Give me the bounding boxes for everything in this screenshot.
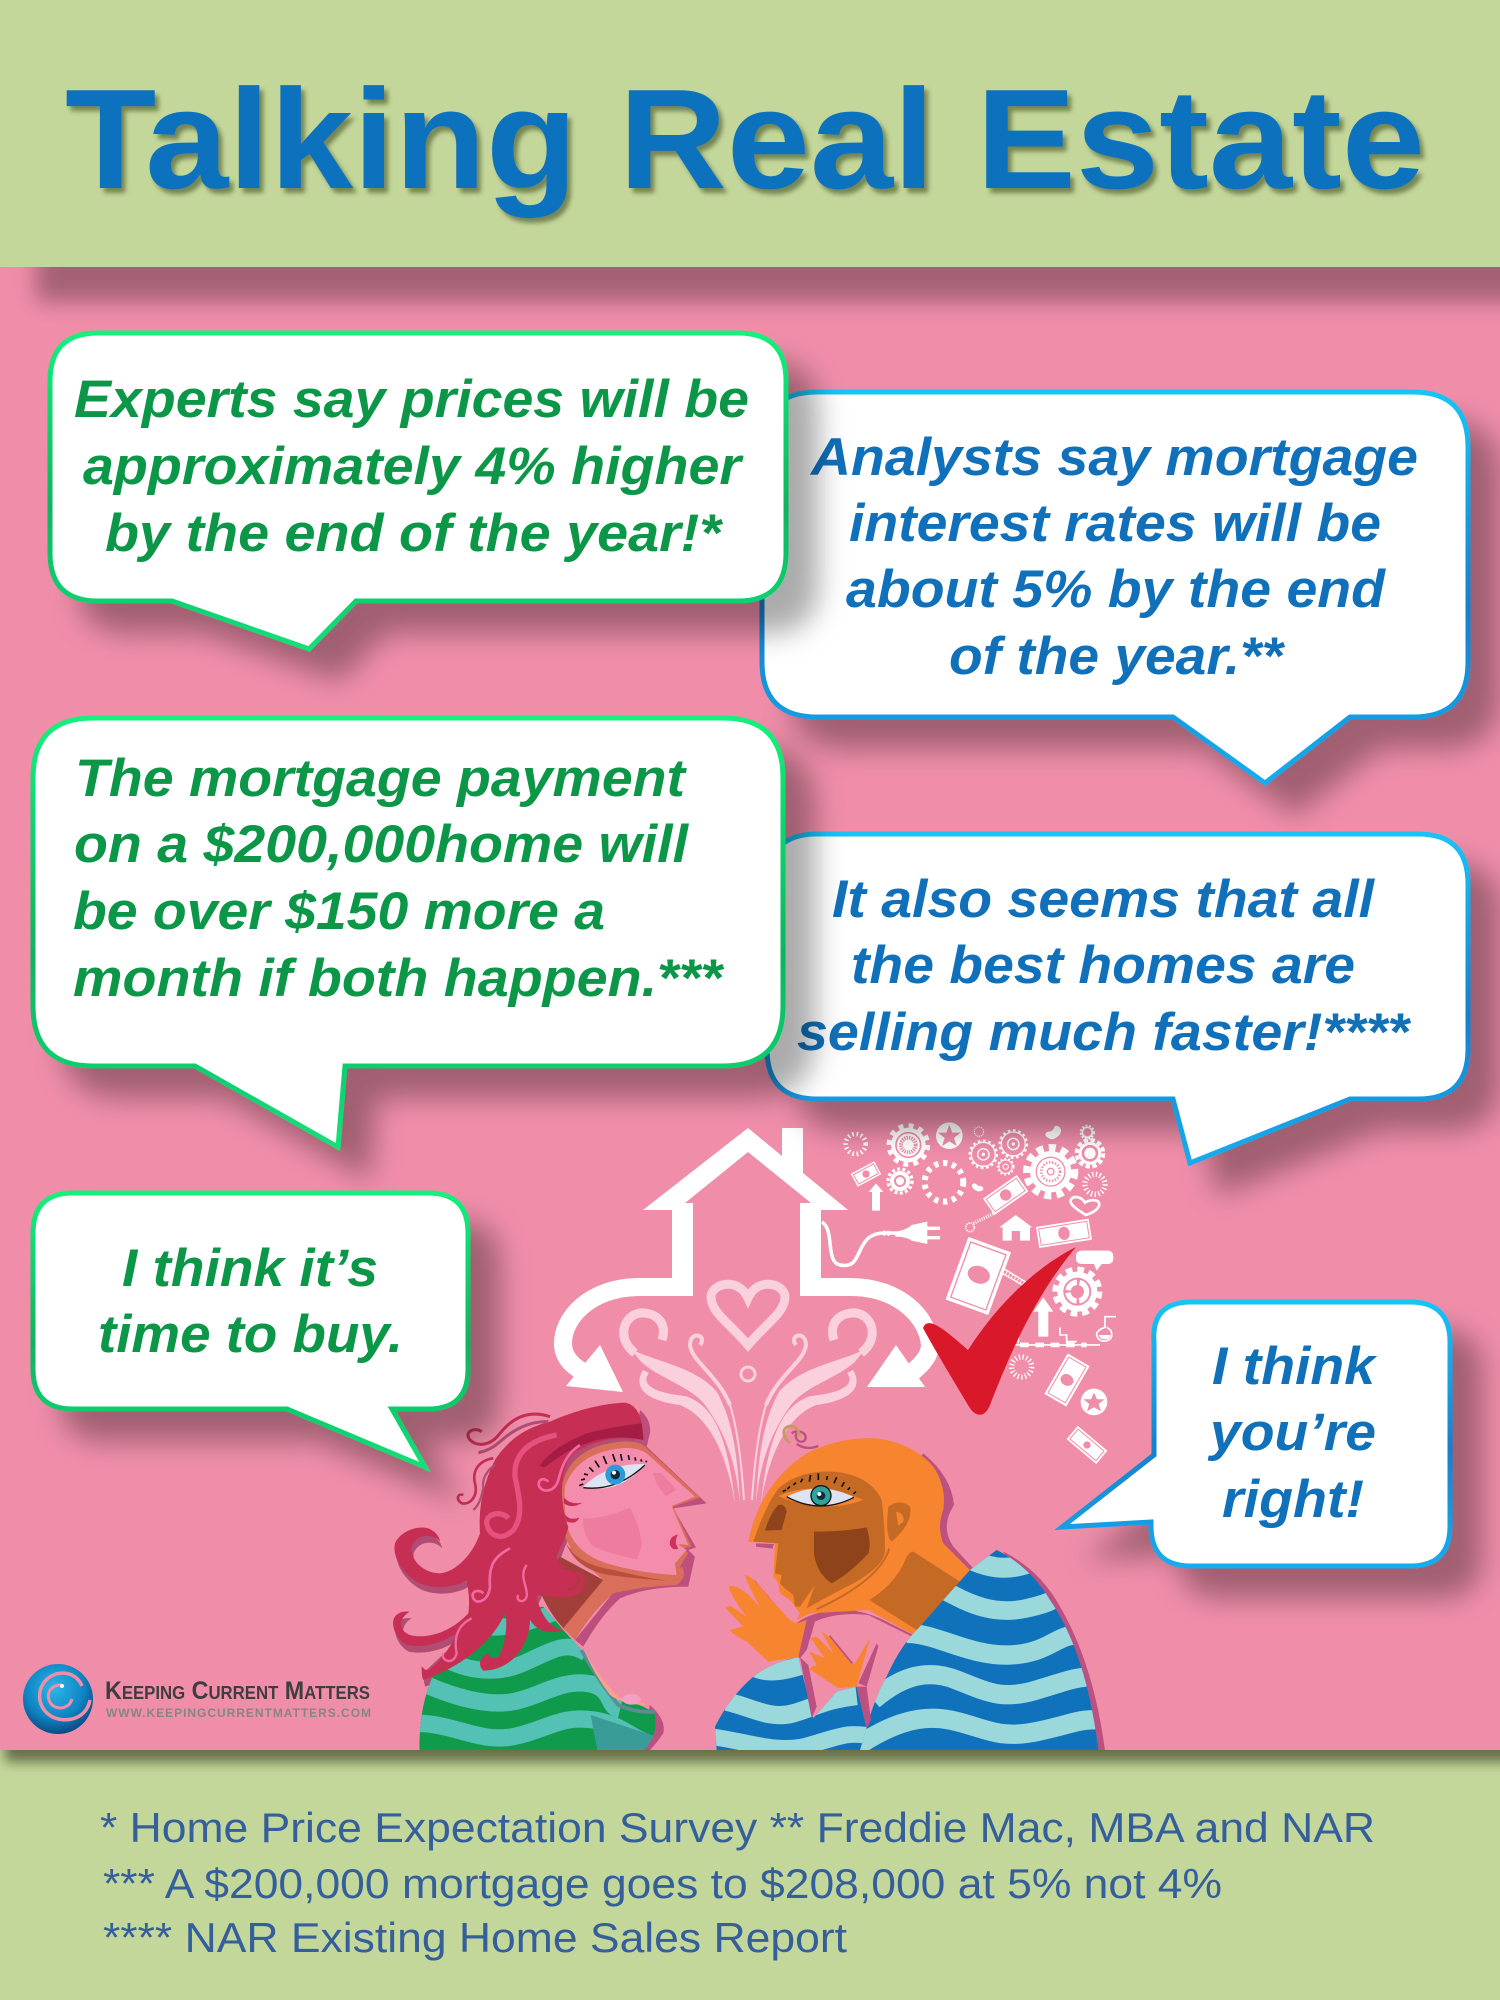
bubble: you're right: I think	[1212, 1337, 1378, 1396]
logo wordmark: Keeping Current Matters	[105, 1677, 370, 1705]
bubble: mortgage rates: of the year.**	[949, 627, 1285, 686]
footer band	[0, 1750, 1500, 2000]
bubble: mortgage payment: month if both happen.***	[73, 949, 724, 1008]
bubble: mortgage payment: on a $200,000home will	[74, 815, 689, 874]
man curl	[784, 1426, 818, 1448]
bubble: prices higher: by the end of the year!*	[105, 504, 723, 563]
woman eye	[579, 1454, 647, 1489]
woman hair shadow	[395, 1409, 645, 1687]
bubble: mortgage rates: interest rates will be	[849, 494, 1381, 553]
title: Talking Real Estate	[65, 60, 1425, 219]
bubble: best homes selling faster: It also seems that all	[832, 870, 1375, 929]
pink background panel	[0, 267, 1500, 1750]
footer band shadow	[0, 1750, 1500, 1771]
man sweater	[857, 1547, 1107, 1750]
footnotes	[100, 1804, 1375, 1961]
bubble: time to buy: I think it’s	[122, 1239, 378, 1298]
illustration: woman	[393, 1403, 707, 1750]
icon: plug cable	[822, 1222, 900, 1265]
bubble: prices higher: approximately 4% higher	[83, 437, 745, 496]
illustration: house with arrows	[563, 1128, 930, 1392]
illustration: man	[710, 1426, 1107, 1750]
illustration: gears, money and icons	[846, 1122, 1116, 1464]
bubble: time to buy	[33, 1193, 468, 1467]
header band	[0, 0, 1500, 267]
woman neck and face	[538, 1410, 707, 1647]
man head	[748, 1438, 973, 1658]
bubble: you're right	[1062, 1302, 1450, 1566]
icon: red check mark	[923, 1247, 1076, 1415]
bubble: prices higher: Experts say prices will be	[74, 370, 749, 429]
logo url: WWW.KEEPINGCURRENTMATTERS.COM	[106, 1706, 371, 1720]
bubble: mortgage rates	[762, 392, 1468, 783]
bubble: mortgage payment: be over $150 more a	[73, 882, 605, 941]
bubble: you're right: right!	[1222, 1470, 1364, 1529]
bubble: prices higher	[50, 333, 786, 649]
man sleeve	[710, 1643, 878, 1750]
logo: Keeping Current Matters	[23, 1664, 371, 1734]
bubble: mortgage rates: about 5% by the end	[846, 560, 1387, 619]
header band shadow	[36, 200, 1500, 302]
footnotes: * Home Price Expectation Survey ** Freddie Mac, MBA and NAR	[100, 1804, 1375, 1851]
footnotes: **** NAR Existing Home Sales Report	[103, 1914, 847, 1961]
bubble: mortgage rates: Analysts say mortgage	[809, 428, 1418, 487]
bubble: best homes selling faster: selling much faster!****	[797, 1003, 1411, 1062]
bubble: you're right: you’re	[1207, 1403, 1376, 1462]
man eye	[783, 1473, 856, 1506]
woman sweater	[413, 1603, 667, 1750]
bubble: best homes selling faster	[767, 834, 1468, 1163]
man hands	[726, 1575, 870, 1688]
bubble: best homes selling faster: the best homes are	[851, 936, 1355, 995]
woman hair	[393, 1403, 643, 1680]
logo swirl icon	[23, 1664, 93, 1734]
illustration: heart and pale swirls	[624, 1284, 872, 1503]
bubble: time to buy: time to buy.	[98, 1305, 403, 1364]
footnotes: *** A $200,000 mortgage goes to $208,000 at 5% not 4%	[103, 1860, 1222, 1907]
bubble: mortgage payment	[33, 718, 783, 1147]
bubble: mortgage payment: The mortgage payment	[75, 749, 687, 808]
icon: speech bubble	[1076, 1251, 1113, 1271]
